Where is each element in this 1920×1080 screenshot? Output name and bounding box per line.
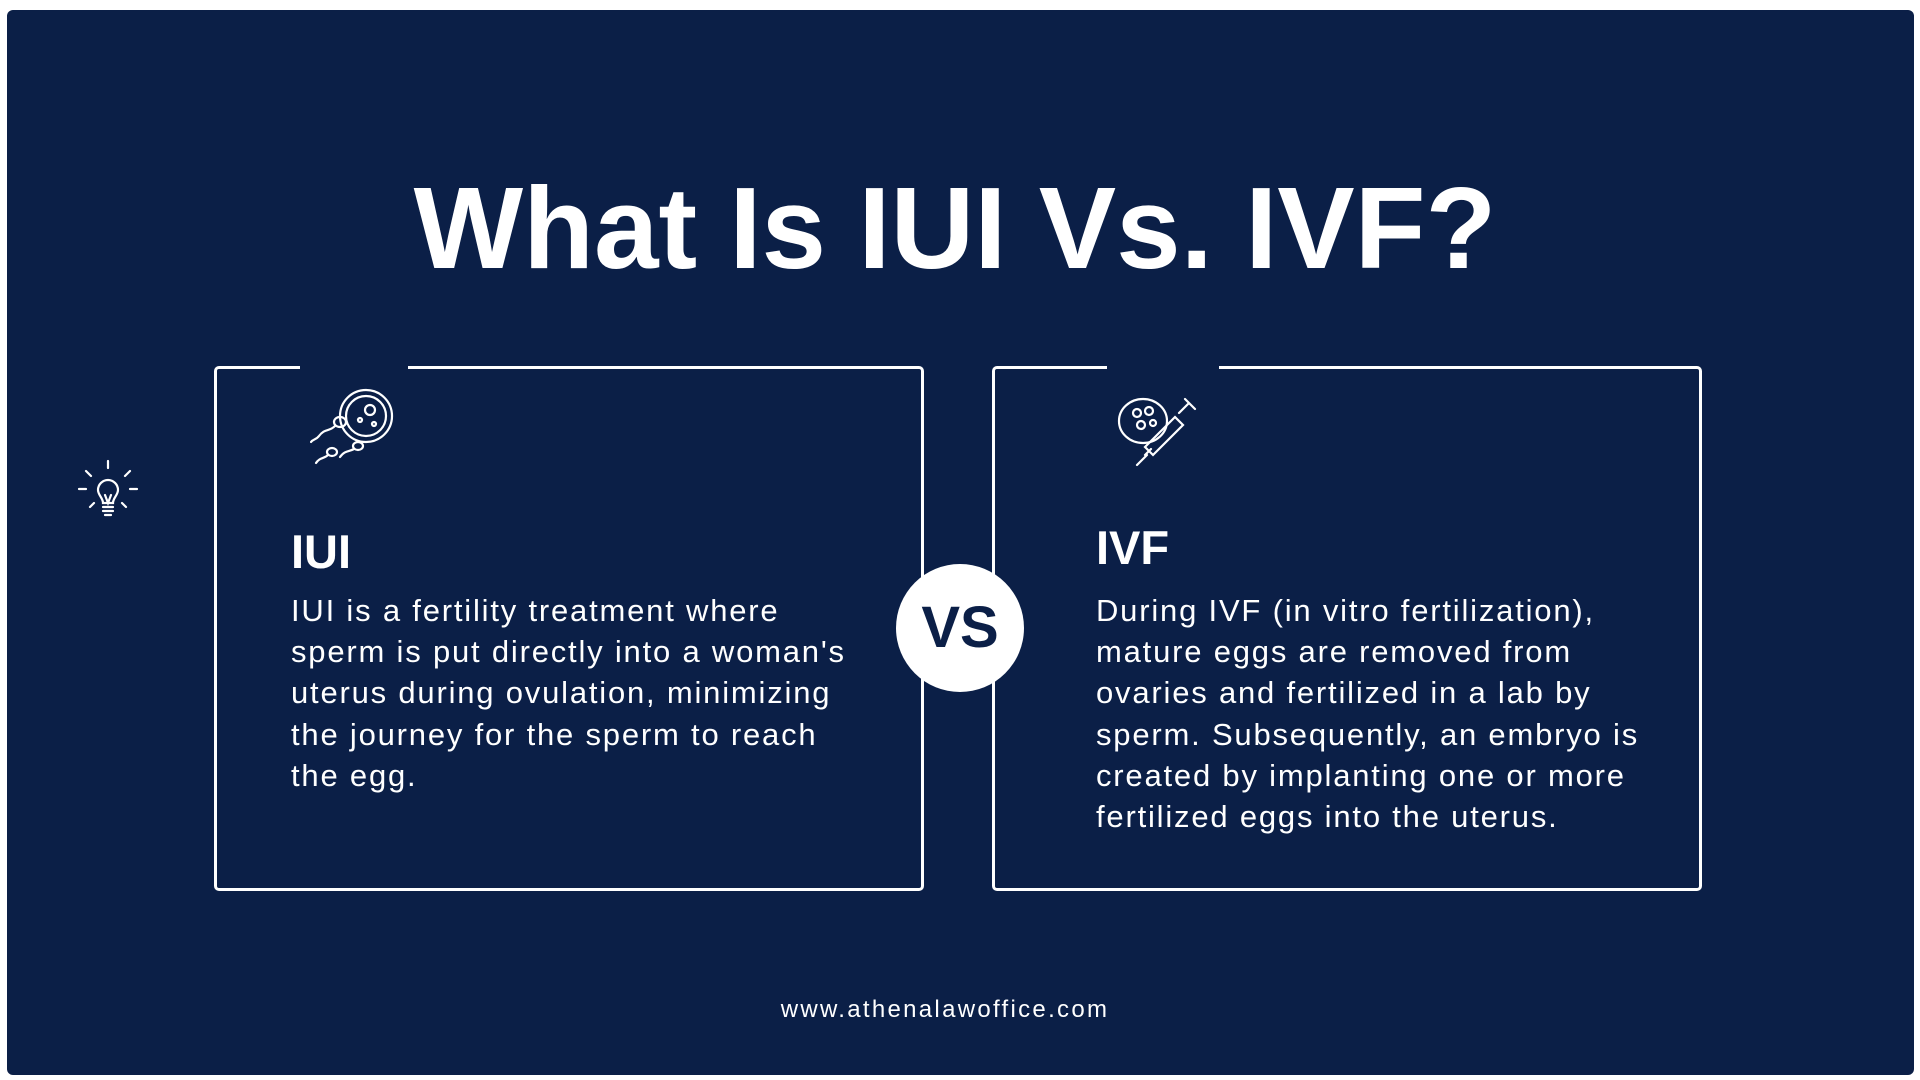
icon: sperm and egg xyxy=(310,388,394,464)
icon: egg and syringe xyxy=(1118,398,1196,466)
footer URL: www.athenalawoffice.com xyxy=(781,996,1109,1023)
text: IUI description: the journey for the sperm to reach xyxy=(291,717,817,752)
heading: IUI: IUI xyxy=(291,525,351,578)
text: IVF description: fertilized eggs into the uterus. xyxy=(1096,799,1559,834)
title: What Is IUI Vs. IVF? xyxy=(414,163,1496,293)
heading: IVF: IVF xyxy=(1096,521,1169,574)
text: IVF description: created by implanting one or more xyxy=(1096,758,1626,793)
text: IVF description: ovaries and fertilized in a lab by xyxy=(1096,675,1591,710)
VS badge: VS xyxy=(921,595,999,660)
text: IUI description: sperm is put directly into a woman's xyxy=(291,634,846,669)
text: IUI description xyxy=(291,593,846,793)
text: IUI description: the egg. xyxy=(291,758,417,793)
text: IVF description: sperm. Subsequently, an embryo is xyxy=(1096,717,1639,752)
icon: light bulb xyxy=(78,460,138,516)
panel: IUI xyxy=(214,366,924,891)
panel: IVF xyxy=(992,366,1702,891)
VS badge xyxy=(896,564,1024,692)
text: IVF description xyxy=(1096,593,1639,834)
text: IVF description: During IVF (in vitro fertilization), xyxy=(1096,593,1595,628)
text: IUI description: uterus during ovulation, minimizing xyxy=(291,675,831,710)
text: IVF description: mature eggs are removed from xyxy=(1096,634,1572,669)
text: IUI description: IUI is a fertility treatment where xyxy=(291,593,779,628)
